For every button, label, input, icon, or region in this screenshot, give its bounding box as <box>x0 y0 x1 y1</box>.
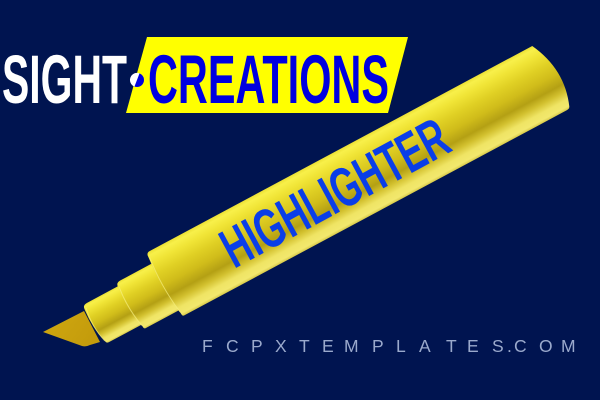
highlighter marker <box>43 41 576 356</box>
main barrel <box>145 41 576 318</box>
website url: FCPXTEMPLATES.COM <box>202 336 576 356</box>
logo word: CREATIONS: CREATIONS <box>148 41 389 118</box>
logo dot <box>130 73 144 87</box>
marker chisel tip <box>43 311 100 346</box>
logo yellow banner <box>126 37 408 113</box>
marker barrel sections <box>74 41 576 356</box>
logo word: SIGHT: SIGHT <box>2 41 127 118</box>
front collar <box>82 284 143 345</box>
middle collar <box>115 261 183 331</box>
marker label: HIGHLIGHTER: HIGHLIGHTER <box>210 105 460 280</box>
logo <box>2 37 408 118</box>
